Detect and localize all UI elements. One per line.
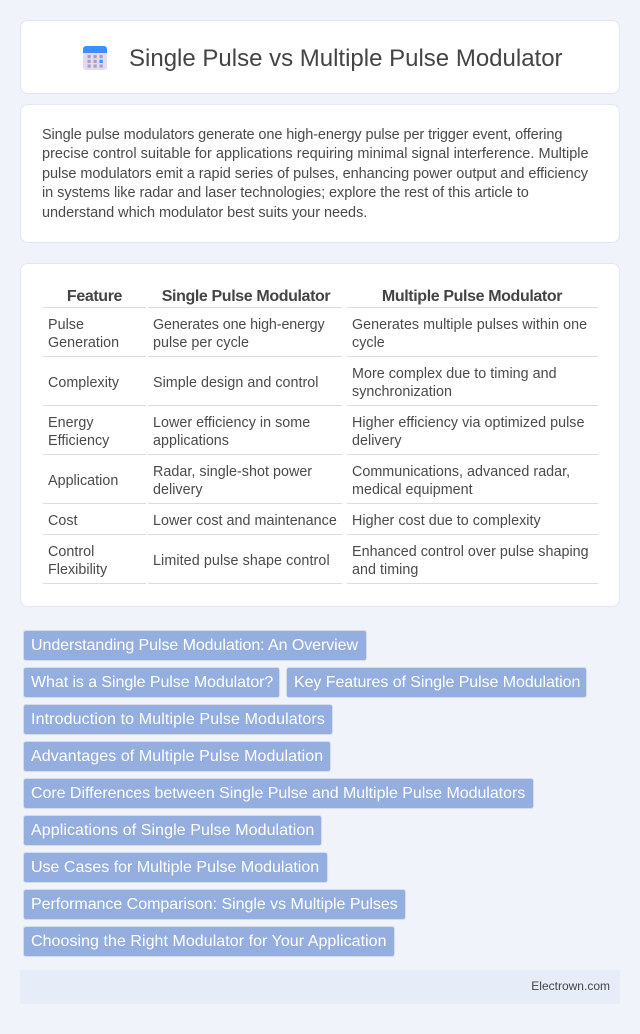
table row: energy efficiency: Higher efficiency via optimized pulse: [352, 415, 584, 431]
icon: calendar: [83, 46, 107, 70]
table row: application: Application: [48, 473, 118, 489]
tag: Applications of Single Pulse Modulation: [31, 822, 314, 839]
table row: application: Radar, single-shot power: [153, 464, 312, 480]
text: introduction paragraph: [42, 127, 589, 221]
table row: complexity: synchronization: [352, 384, 452, 400]
panel: comparison table: [20, 263, 620, 607]
table row: application: medical equipment: [352, 482, 473, 498]
table row: complexity: Simple design and control: [153, 375, 319, 391]
table row: energy efficiency: Energy: [48, 415, 94, 431]
tag: [23, 741, 331, 772]
tag: What is a Single Pulse Modulator?: [31, 674, 273, 691]
text: introduction paragraph: precise control suitable for applications requiring minimal signal interference. Multiple: [42, 146, 589, 162]
tag: [23, 815, 322, 846]
tag: Advantages of Multiple Pulse Modulation: [31, 748, 323, 765]
text: introduction paragraph: pulse modulators emit a rapid series of pulses, enhancing power output and efficiency: [42, 166, 588, 182]
table row: control flexibility: [48, 544, 589, 578]
table header row: Multiple Pulse Modulator: [382, 288, 562, 305]
table row: pulse generation: Generation: [48, 335, 119, 351]
table row: complexity: [48, 366, 557, 400]
table row: cost: Cost: [48, 513, 78, 529]
table header row: Feature: [67, 288, 122, 305]
tag: [23, 926, 395, 957]
table row: energy efficiency: [48, 415, 584, 449]
tag: Understanding Pulse Modulation: An Overview: [31, 637, 358, 654]
tag: Core Differences between Single Pulse and Multiple Pulse Modulators: [31, 785, 525, 802]
table row: application: [48, 464, 570, 498]
tag: Introduction to Multiple Pulse Modulators: [31, 711, 325, 728]
table row: cost: Lower cost and maintenance: [153, 513, 337, 529]
table row: complexity: More complex due to timing and: [352, 366, 557, 382]
table row: pulse generation: Generates multiple pulses within one: [352, 317, 587, 333]
tag: [286, 667, 587, 698]
table row: control flexibility: Limited pulse shape control: [153, 553, 330, 569]
table row: energy efficiency: applications: [153, 433, 229, 449]
table row: application: Communications, advanced radar,: [352, 464, 570, 480]
table row: control flexibility: Flexibility: [48, 562, 107, 578]
tag: [23, 630, 367, 661]
text: introduction paragraph: Single pulse modulators generate one high-energy pulse per trigger event, offering: [42, 127, 562, 143]
tag: Key Features of Single Pulse Modulation: [294, 674, 580, 691]
panel: title header: [20, 20, 620, 94]
table row: pulse generation: Pulse: [48, 317, 84, 333]
table row: pulse generation: [48, 317, 587, 351]
table row: cost: Higher cost due to complexity: [352, 513, 541, 529]
tag: Use Cases for Multiple Pulse Modulation: [31, 859, 319, 876]
tag: [23, 667, 280, 698]
tag: [23, 852, 328, 883]
table row: control flexibility: and timing: [352, 562, 418, 578]
tag: [23, 889, 406, 920]
table row: pulse generation: pulse per cycle: [153, 335, 249, 351]
table row: control flexibility: Control: [48, 544, 94, 560]
tag: Choosing the Right Modulator for Your Application: [31, 933, 387, 950]
footer bar: [20, 970, 620, 1004]
table row: application: delivery: [153, 482, 203, 498]
table row: energy efficiency: delivery: [352, 433, 402, 449]
panel: introduction text: [20, 104, 620, 243]
table header row: [67, 288, 562, 305]
text: introduction paragraph: understand which modulator best suits your needs.: [42, 205, 367, 221]
table header row: Single Pulse Modulator: [162, 288, 330, 305]
table row: complexity: Complexity: [48, 375, 119, 391]
tag: [23, 778, 534, 809]
table row: control flexibility: Enhanced control over pulse shaping: [352, 544, 589, 560]
tag: Performance Comparison: Single vs Multiple Pulses: [31, 896, 398, 913]
tag: [23, 704, 333, 735]
footer credit: Electrown.com: [531, 979, 610, 993]
table row: pulse generation: cycle: [352, 335, 385, 351]
text: introduction paragraph: in systems like radar and laser technologies; explore the rest of this article to: [42, 185, 529, 201]
tag list: article topics: [23, 630, 587, 957]
table row: energy efficiency: Lower efficiency in some: [153, 415, 310, 431]
table row: cost: [48, 513, 541, 529]
table row: energy efficiency: Efficiency: [48, 433, 109, 449]
title: Single Pulse vs Multiple Pulse Modulator: [129, 45, 563, 72]
table row: pulse generation: Generates one high-energy: [153, 317, 325, 333]
